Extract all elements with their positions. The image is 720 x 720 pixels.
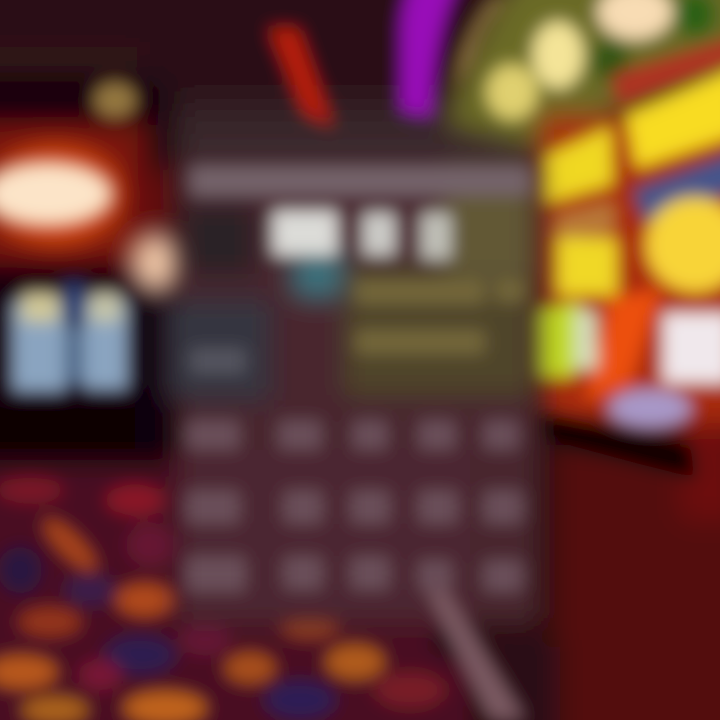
machine base shadow — [535, 410, 695, 478]
orange lit panel — [0, 145, 123, 245]
screens — [12, 282, 128, 392]
lamp: yellow — [93, 82, 137, 118]
right slot machine — [445, 0, 720, 478]
panel base — [165, 160, 540, 625]
top greens — [445, 0, 720, 425]
title strip — [190, 166, 530, 196]
olive rows — [355, 280, 525, 354]
carpet pattern — [0, 476, 490, 720]
purple streak — [400, 0, 464, 118]
lamp: pink — [131, 233, 183, 293]
ceiling — [0, 0, 560, 180]
carpet — [0, 450, 490, 720]
left slot machine — [0, 75, 183, 460]
bright text blobs — [272, 210, 452, 260]
yellow bands — [535, 35, 720, 428]
table panel — [165, 160, 540, 625]
red streak — [268, 28, 334, 128]
right wall — [500, 400, 720, 720]
machine body — [0, 75, 175, 460]
lights — [455, 0, 715, 120]
grid rows — [186, 348, 523, 592]
light reflection on floor — [426, 590, 526, 720]
